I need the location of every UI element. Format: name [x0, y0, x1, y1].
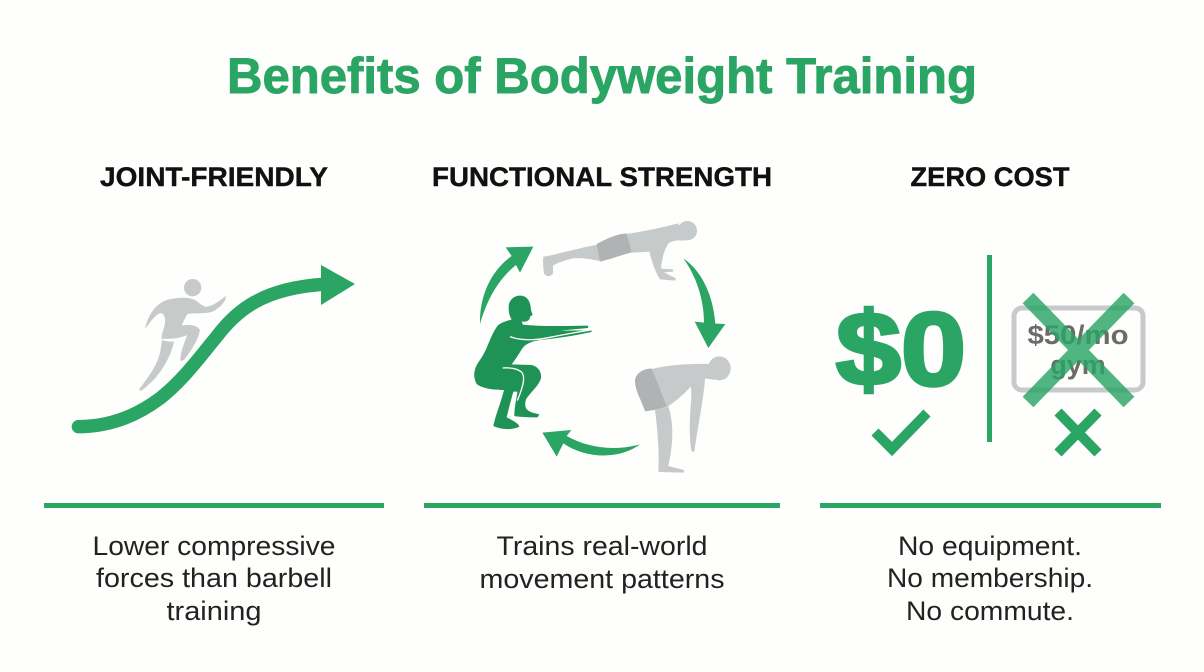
icon: exercise cycle [474, 221, 731, 473]
gym price text: $50/mo [1028, 320, 1128, 350]
icon: small cross [1058, 412, 1098, 453]
panel: functional strength [424, 162, 780, 594]
divider [820, 503, 1161, 508]
description: movement patterns [480, 564, 724, 594]
heading: joint-friendly: JOINT-FRIENDLY [100, 162, 328, 192]
rising arrow [78, 265, 355, 427]
crossed-out gym price [1014, 298, 1143, 402]
description: training [166, 596, 262, 626]
gym price text: gym [1050, 350, 1106, 380]
divider [424, 503, 780, 508]
description: No equipment. [898, 531, 1082, 561]
description: No commute. [906, 596, 1074, 626]
description: Lower compressive [92, 531, 336, 561]
heading: zero cost: ZERO COST [910, 162, 1070, 192]
price box [1014, 308, 1143, 390]
description: forces than barbell [96, 563, 332, 593]
figure: squat [474, 296, 592, 429]
heading: functional strength: FUNCTIONAL STRENGTH [432, 162, 772, 192]
description [887, 531, 1093, 626]
panel: zero cost [820, 162, 1161, 626]
title: Benefits of Bodyweight Training [227, 48, 977, 104]
gym price text [1028, 320, 1128, 380]
description [92, 531, 336, 626]
description [480, 531, 724, 594]
big price: $0 [836, 292, 966, 408]
arrows: cycle [480, 247, 725, 457]
vertical separator [987, 255, 992, 442]
figure: forward bend [635, 356, 731, 473]
panel: joint-friendly [44, 162, 384, 626]
divider [44, 503, 384, 508]
figure: push-up [543, 221, 697, 281]
description: No membership. [887, 563, 1093, 593]
large cross [1028, 298, 1129, 402]
description: Trains real-world [496, 531, 708, 561]
runner [139, 279, 226, 391]
icon: runner on rising arrow [78, 265, 355, 427]
icon: check mark [875, 413, 927, 449]
